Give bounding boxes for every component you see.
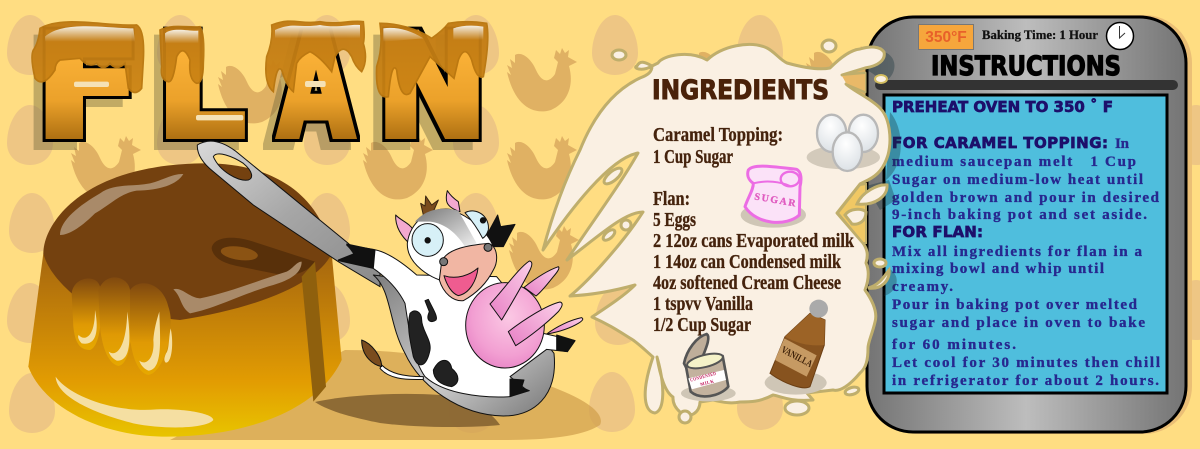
ingredient list: 2 12oz cans Evaporated milk [653, 230, 855, 252]
temperature display: 350°F [925, 29, 967, 46]
splash droplets [601, 40, 889, 423]
ingredient list [653, 124, 855, 336]
splash top-right gap [842, 74, 865, 91]
instructions heading: INSTRUCTIONS [931, 51, 1121, 82]
instructions text: FOR FLAN: [892, 223, 983, 241]
dark shadow band [315, 394, 500, 427]
instructions text: Mix all ingredients for flan in a [892, 244, 1142, 260]
instructions text: FOR CARAMEL TOPPING: [892, 134, 1108, 152]
instructions text: 9-inch baking pot and set aside. [892, 207, 1147, 223]
background pattern: chickens [71, 46, 876, 289]
flan [28, 163, 342, 437]
ingredients splash [543, 44, 890, 415]
ingredient list: Caramel Topping: [653, 124, 783, 146]
cow tail [380, 365, 423, 379]
instructions text: creamy. [892, 279, 953, 295]
ingredient list: 4oz softened Cream Cheese [653, 272, 841, 294]
ingredient list: 1 Cup Sugar [653, 146, 733, 168]
icon: condensed milk can: MILK [700, 379, 715, 388]
instructions text: medium saucepan melt 1 Cup [892, 154, 1136, 170]
icon: clock [1106, 22, 1134, 50]
instructions text: PREHEAT OVEN TO 350 ˚ F [892, 98, 1113, 116]
cow udder [466, 283, 544, 368]
instructions text: for 60 minutes. [892, 337, 1016, 353]
instructions text: Sugar on medium-low heat until [892, 172, 1143, 188]
spoon bowl [373, 275, 554, 416]
splash side gold gap [838, 184, 866, 243]
caramel highlights [60, 174, 302, 313]
icon: eggs [807, 115, 880, 171]
instructions text: mixing bowl and whip until [892, 261, 1104, 277]
oven [867, 15, 1192, 434]
icon: vanilla bottle [765, 300, 828, 395]
ingredient list: 1 14oz can Condensed milk [653, 251, 842, 273]
cow front teats [490, 261, 562, 346]
temperature display [918, 24, 974, 50]
oven shadow [872, 15, 1192, 434]
oven droplet [875, 75, 887, 83]
cow hooves [338, 244, 375, 268]
splash shadows on oven [866, 52, 901, 296]
icon: sugar bag: SUGAR [753, 191, 798, 210]
title caramel drips [32, 21, 488, 120]
flan body [28, 253, 342, 437]
icon: condensed milk can: CONDENSED [690, 370, 717, 383]
instructions text: Let cool for 30 minutes then chill [892, 355, 1160, 371]
instructions text: in refrigerator for about 2 hours. [892, 373, 1159, 389]
title: FLAN: L [157, 6, 245, 168]
title: FLAN: F [36, 6, 140, 168]
oven window [884, 95, 1167, 393]
oven body [867, 17, 1186, 432]
table shadow [170, 350, 601, 440]
cow eyes [412, 224, 443, 256]
caramel drips on flan [72, 277, 171, 375]
ingredient list: 1 tspvv Vanilla [653, 293, 753, 315]
title: FLAN [36, 6, 487, 168]
instructions text: golden brown and pour in desired [892, 190, 1160, 206]
cow head [407, 209, 494, 283]
flan caramel top [43, 163, 332, 320]
cow on spoon [338, 191, 583, 416]
ingredient list: Flan: [653, 188, 690, 210]
cow spots [409, 311, 430, 365]
flan side crease [302, 262, 326, 402]
ingredient list: 1/2 Cup Sugar [653, 314, 751, 336]
cow ears and hair [396, 215, 413, 243]
icon: vanilla bottle: VANILLA [780, 344, 815, 370]
instructions text: In [1115, 136, 1130, 152]
icon: sugar bag [741, 166, 806, 228]
instructions text [892, 98, 1160, 389]
ingredient list: 5 Eggs [653, 209, 696, 231]
title: FLAN: A [278, 6, 354, 168]
cow body [338, 245, 575, 397]
ingredients heading: INGREDIENTS [652, 75, 829, 106]
cow snout and mouth [439, 243, 497, 301]
instructions text: Pour in baking pot over melted [892, 297, 1138, 313]
icon: condensed milk can [681, 334, 736, 401]
title: FLAN: N [377, 6, 487, 168]
spoon handle [197, 141, 380, 287]
spoon shadow on flan [212, 238, 315, 275]
drip highlights [56, 310, 213, 427]
oven door bar [875, 80, 1178, 90]
instructions text: sugar and place in oven to bake [892, 315, 1145, 331]
cow rear teats [524, 267, 583, 334]
baking time: Baking Time: 1 Hour [982, 27, 1098, 42]
